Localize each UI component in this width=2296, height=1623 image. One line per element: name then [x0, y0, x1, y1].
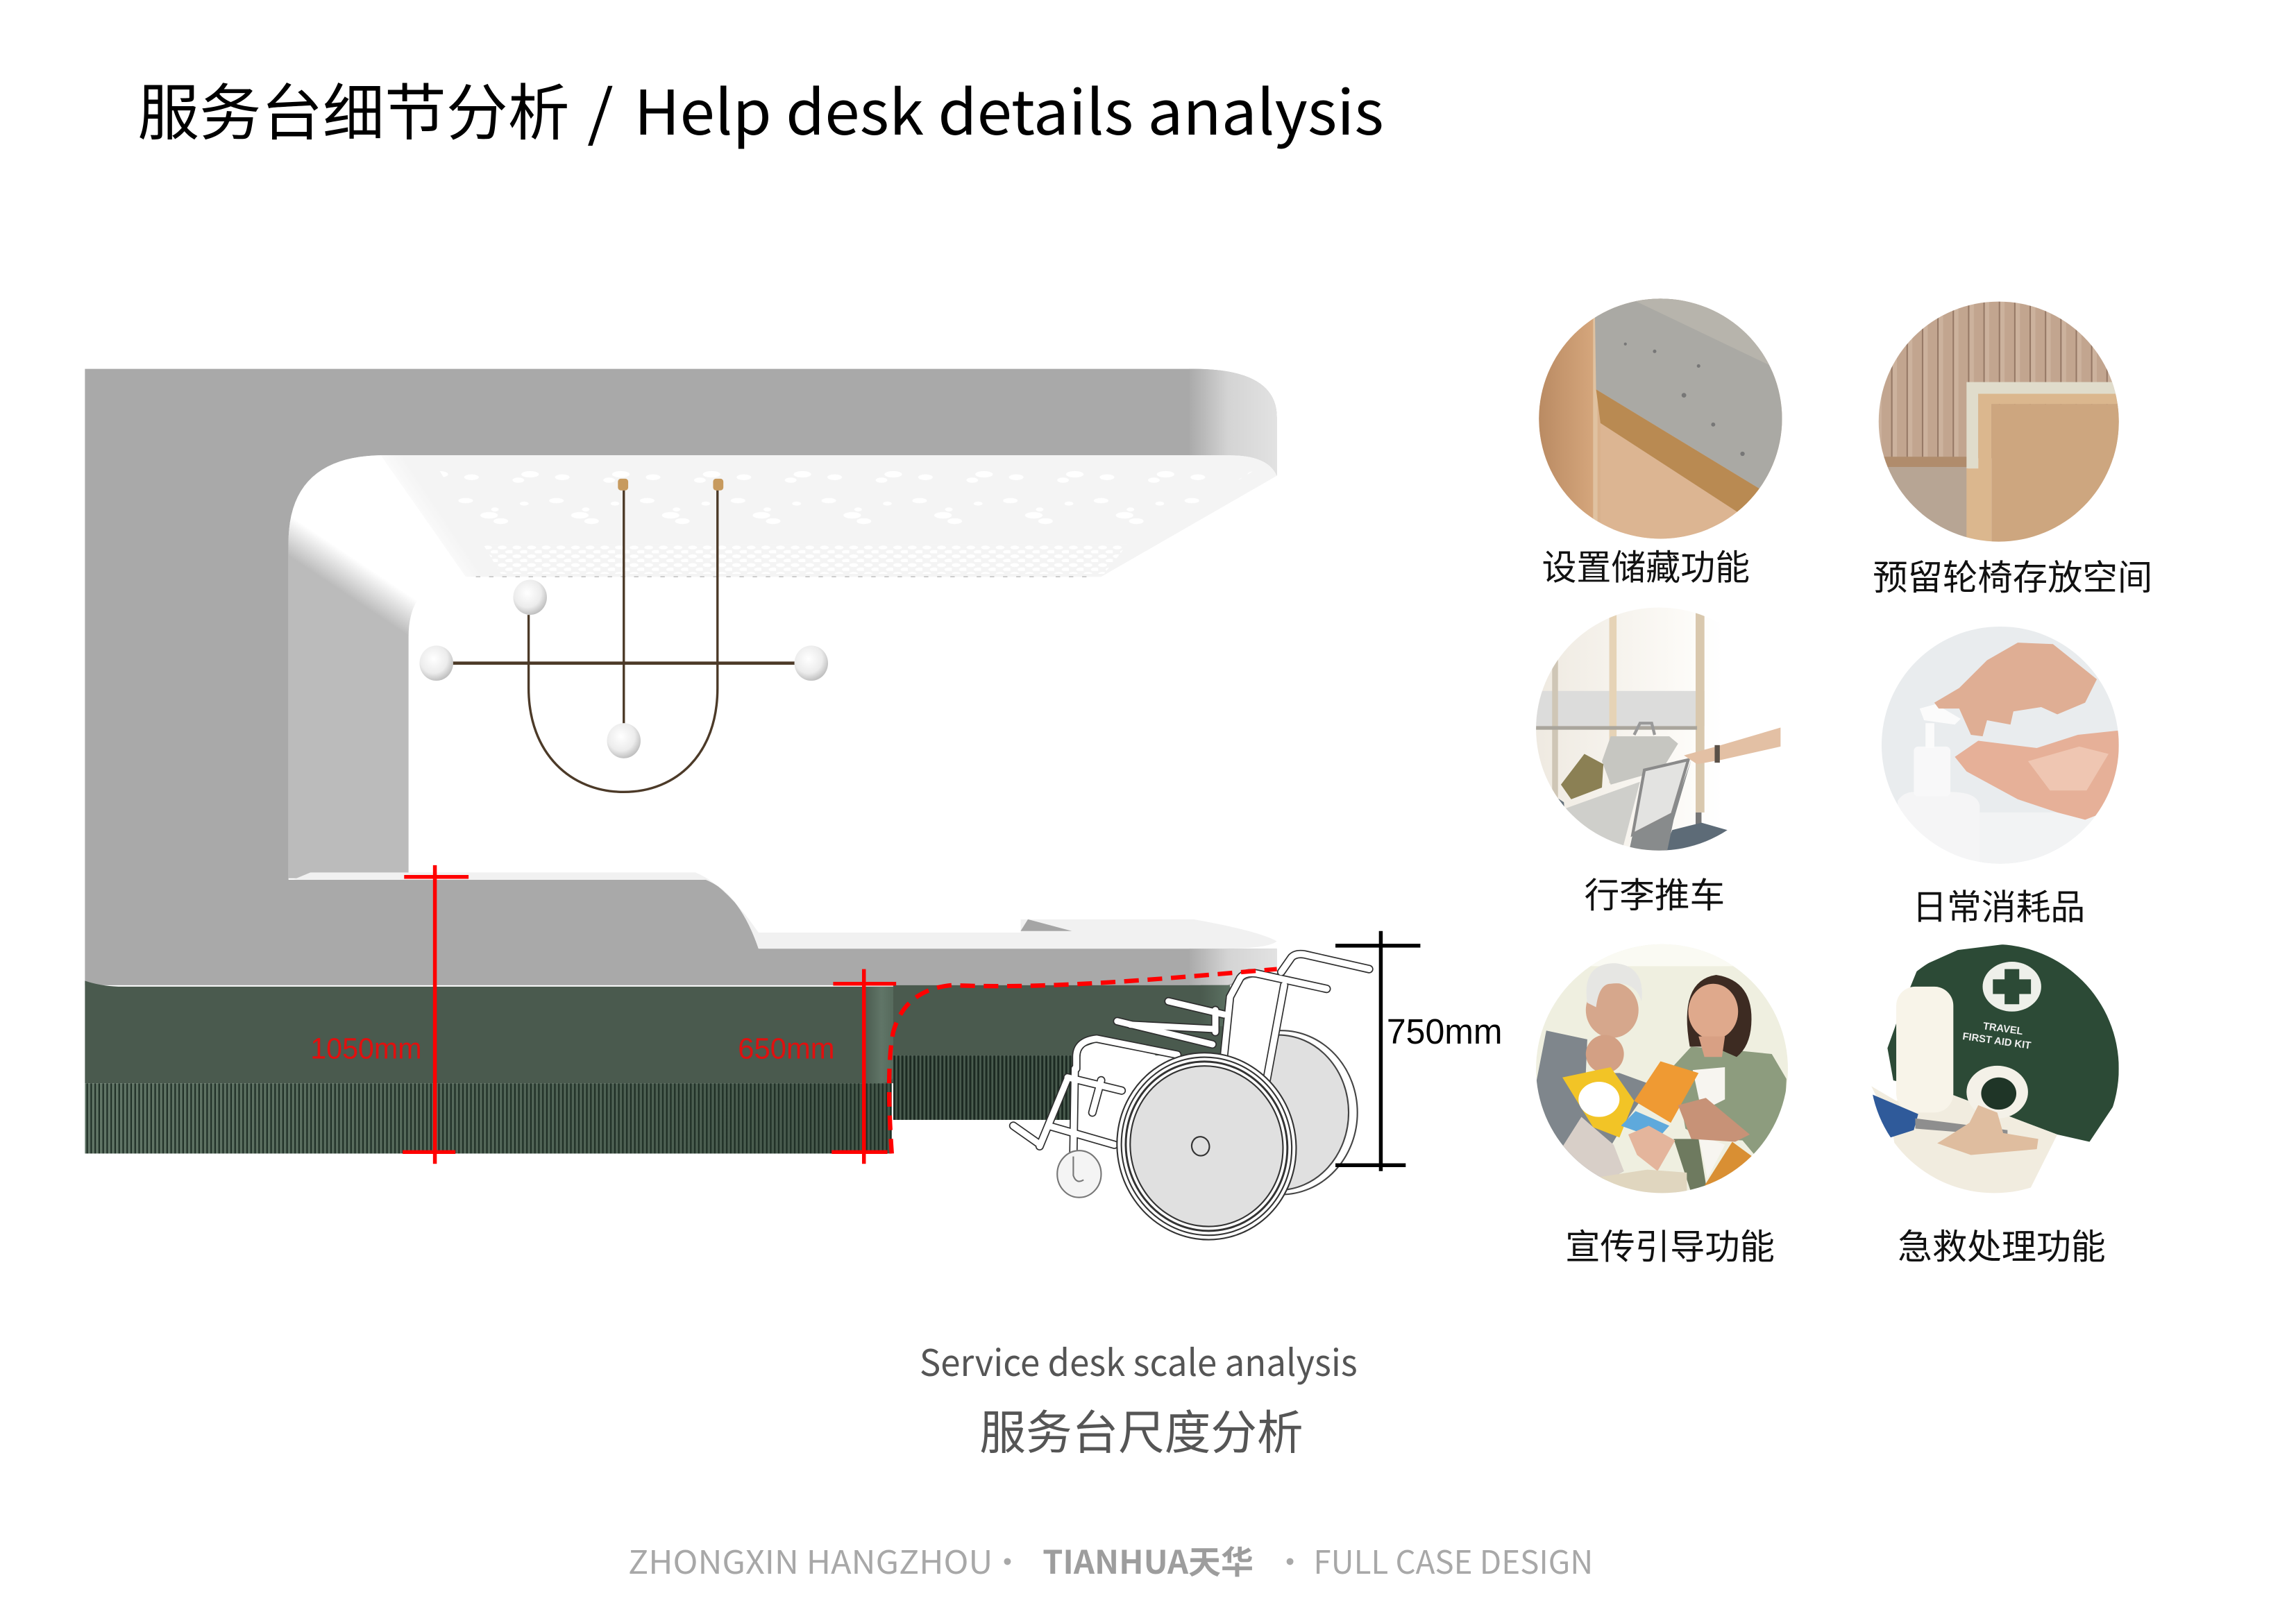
1050mm dimension: [310, 865, 469, 1164]
perforated ceiling panel: [381, 455, 1277, 577]
counter top surface: [293, 872, 1277, 949]
650mm dimension: 650mm: [738, 1032, 835, 1064]
750mm dimension: [1335, 931, 1503, 1171]
caption: service desk scale english: Service desk scale analysis: [920, 1334, 1358, 1387]
hanging pendant lamp: [419, 479, 828, 792]
750mm dimension: 750mm: [1387, 1012, 1503, 1051]
photo: luggage trolley: [1530, 603, 1787, 855]
front slatted base: [85, 1083, 892, 1153]
front big wheel: [1097, 1034, 1316, 1259]
caster wheel: [1057, 1150, 1101, 1198]
label: brochure guidance: 宣传引导功能: [1565, 1218, 1775, 1269]
footer credit line: ·: [991, 1537, 1024, 1583]
photo: daily consumables: [1874, 622, 2123, 871]
title: 服务台细节分析: [137, 63, 570, 153]
first aid cross emblem: [1983, 962, 2041, 1012]
photo: wheelchair storage space: [1874, 300, 2123, 547]
kit caption: TRAVEL: [1982, 1021, 2024, 1037]
counter right rounded edge: [1189, 949, 1277, 985]
label: wheelchair space: 预留轮椅存放空间: [1873, 549, 2152, 600]
label: daily consumables: 日常消耗品: [1912, 878, 2085, 930]
title: /: [587, 63, 614, 153]
1050mm dimension: 1050mm: [310, 1032, 422, 1064]
photo: storage detail: [1537, 293, 1787, 542]
curved inner wall with white to grey shading: [289, 455, 466, 878]
chair frame outline: [1013, 954, 1369, 1157]
photo: first aid kit: FIRST AID KIT: [1961, 1031, 2032, 1052]
red dashed wheelchair clearance line: [889, 969, 1277, 1153]
recessed green panel: [893, 985, 1230, 1055]
green front panel: [85, 980, 893, 1083]
photo: first aid kit: [1867, 937, 2123, 1200]
footer credit line: ZHONGXIN HANGZHOU: [628, 1537, 993, 1583]
recessed panel lit edge: [1201, 985, 1230, 1026]
lamp globes: [419, 579, 828, 758]
footer credit line: [628, 1537, 1593, 1583]
green corner pilaster: [864, 987, 893, 1083]
footer credit line: TIANHUA天华: [1043, 1537, 1253, 1583]
lamp ceiling mounts: [618, 479, 723, 491]
footer credit line: FULL CASE DESIGN: [1313, 1537, 1593, 1583]
650mm dimension: [738, 969, 896, 1164]
service desk elevation drawing: [85, 369, 1503, 1259]
label: storage: 设置储藏功能: [1542, 538, 1750, 590]
rear wheel: [1205, 1030, 1358, 1194]
desk grey body: [85, 369, 1277, 985]
photo: brochure guidance: [1530, 937, 1793, 1200]
recessed green slats: [893, 1055, 1077, 1120]
desk top right rounded edge: [1189, 369, 1277, 476]
wheelchair: [1013, 954, 1369, 1259]
label: luggage trolley: 行李推车: [1585, 867, 1725, 918]
chair frame fill: [1013, 954, 1369, 1157]
label: first aid: 急救处理功能: [1898, 1218, 2106, 1269]
backrest and seat fill: [1077, 987, 1280, 1080]
title: Help desk details analysis: [634, 63, 1384, 153]
caption: service desk scale chinese: 服务台尺度分析: [979, 1396, 1303, 1463]
footer credit line: ·: [1274, 1537, 1306, 1583]
